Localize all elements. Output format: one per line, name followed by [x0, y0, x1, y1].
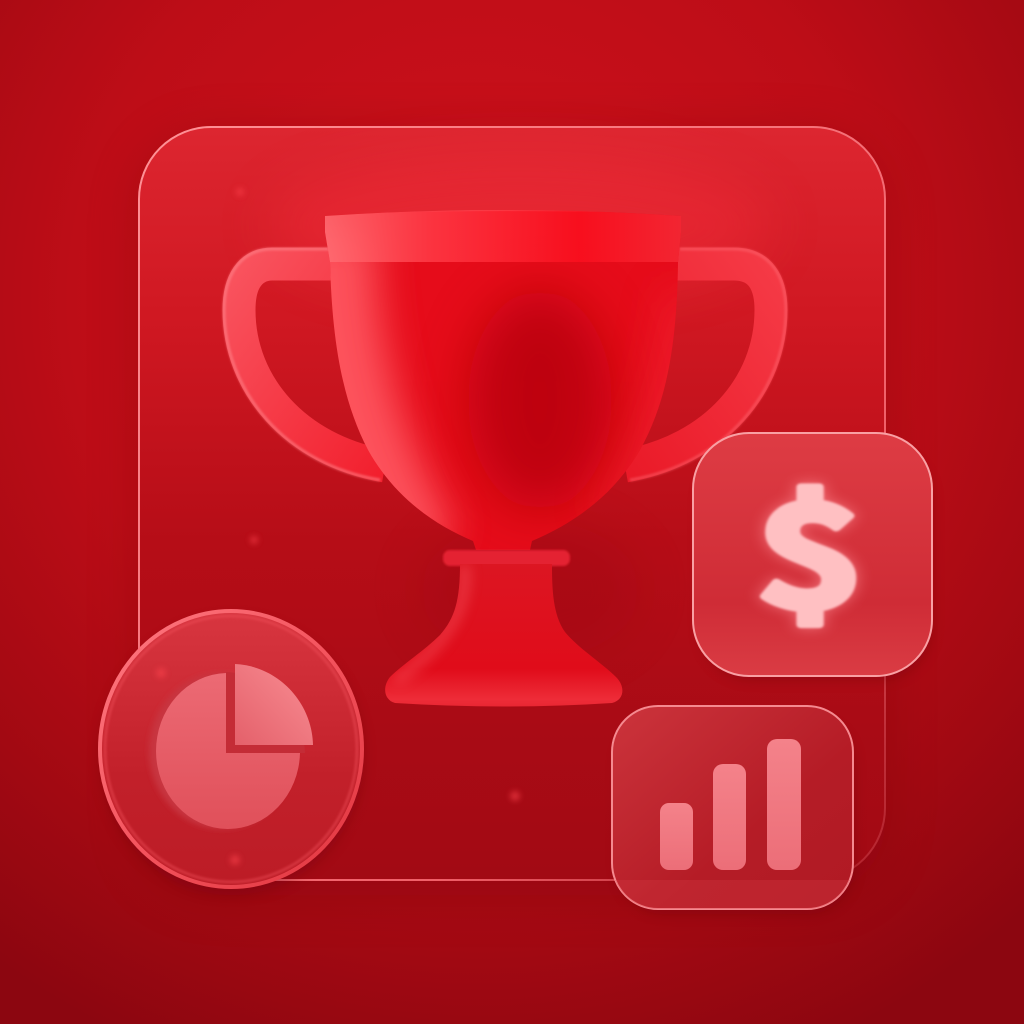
bar 3: [767, 739, 801, 870]
trophy right handle: [625, 249, 786, 480]
bar 1: [660, 803, 693, 870]
panel: glass card: [139, 127, 885, 895]
cup dark centre: [468, 290, 612, 510]
trophy left handle: [224, 249, 385, 480]
pie large slice: [156, 673, 300, 829]
trophy cup body: [325, 210, 681, 550]
cup right highlight: [611, 308, 676, 488]
pie small slice: [235, 664, 313, 745]
decorative sparkle glows: [156, 188, 520, 865]
trophy glow: [270, 155, 770, 295]
cup left highlight: [325, 232, 466, 537]
pie shadow: [149, 673, 295, 829]
icon: pie chart badge: [100, 611, 364, 895]
dollar sign: $: [756, 443, 864, 648]
rim band: [325, 210, 681, 262]
trophy base: [385, 564, 622, 706]
icon: bar chart badge: [612, 706, 854, 914]
dollar sign glow: $: [756, 443, 864, 648]
icon: trophy: [224, 200, 786, 715]
pie notch shadow: [226, 672, 305, 753]
icon: dollar badge: [693, 433, 932, 680]
bar 2: [713, 764, 746, 870]
tile lower band: [612, 880, 853, 910]
trophy stem collar: [443, 550, 570, 566]
